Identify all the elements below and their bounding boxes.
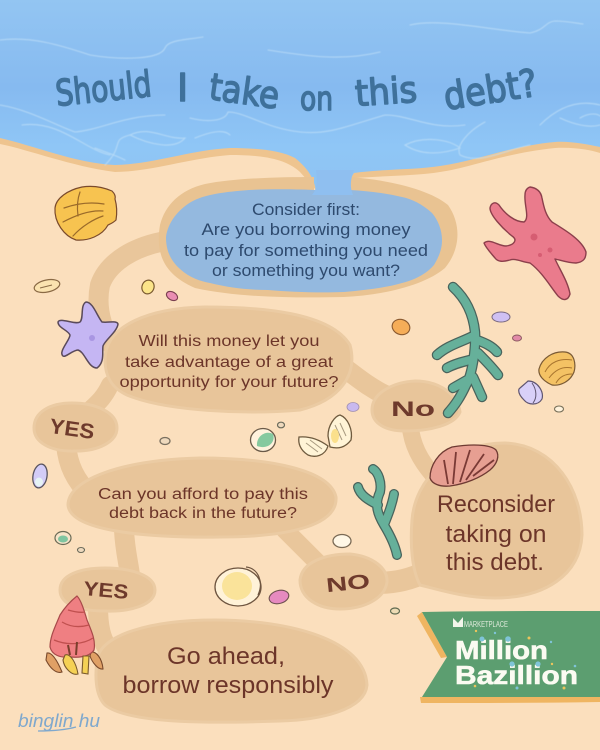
text: opportunity question: opportunity for your future? [120,374,339,391]
icon: white butterfly shell [299,415,351,456]
icon: pink pebble [165,290,179,302]
icon: green pebble [250,428,276,452]
text: opportunity question [120,333,339,391]
title: debt? [441,61,540,119]
icon: pink starfish [484,187,586,300]
text: consider first [184,201,428,280]
panel: no branch two [300,554,387,609]
icon: purple white shell [519,381,542,404]
text: go ahead [122,643,334,699]
pool sand rim [159,177,457,297]
title: I [177,66,188,110]
confetti dots [474,630,576,690]
icon: purple pebble [492,312,510,322]
text: afford question [98,486,308,522]
text: marketplace: MARKETPLACE [464,620,508,629]
text: go ahead: borrow responsibly [122,672,334,699]
water with channel [0,0,600,195]
text: consider first: or something you want? [212,262,400,280]
icon: striped yellow shell [539,352,575,385]
label: yes: YES [83,578,129,604]
icon: hermit crab [46,596,103,674]
icon: seaweed large [437,287,498,413]
signature: binglin hu [18,710,100,731]
label: yes: YES [48,415,96,444]
icon: lilac pebble [347,402,359,412]
icon: yellow scallop shell [55,186,117,240]
icon: yellow pebble [140,278,156,296]
icon: small shell left [33,277,61,295]
text: reconsider: this debt. [446,549,544,576]
panel: reconsider outcome [411,443,582,598]
text: afford question: debt back in the future? [109,505,297,522]
panel: go ahead outcome [96,620,367,722]
panel: yes branch two [60,568,155,611]
icon: pink pebble low [268,588,290,606]
icon: ring pebble right [554,406,564,412]
panel: afford question [68,458,336,537]
text: consider first: Consider first: [252,201,360,219]
text: consider first: Are you borrowing money [202,221,411,239]
icon: cream shell [215,567,261,606]
panel: no branch one [372,381,460,431]
shoreline sand band [0,100,600,190]
label: no: NO [325,571,371,597]
icon: green pebble left [55,532,71,544]
text: opportunity question: Will this money let you [138,333,320,350]
text: reconsider [437,491,555,576]
text: afford question: Can you afford to pay this [98,486,308,503]
icon: purple starfish [58,302,118,368]
icon: ring pebble left [160,438,170,444]
icon: ring pebble low [78,548,84,552]
icon: pink clam [430,445,498,486]
text: bazillion: Bazillion [455,660,578,690]
channel [312,170,354,195]
title: Should [54,64,153,115]
pool water [166,189,442,292]
title: take [207,65,282,118]
text: million: Million [455,635,548,665]
text: reconsider: taking on [446,521,546,548]
icon: small pink pebble [512,335,522,341]
sand path network [66,240,433,655]
text: go ahead: Go ahead, [167,643,285,670]
title: on [300,79,333,118]
panel: consider first pool [159,170,457,297]
icon: purple pebble left [31,463,49,489]
banner: million bazillion logo [417,611,600,703]
text: consider first: to pay for something you need [184,242,428,260]
panel: yes branch one [34,403,117,451]
title [54,61,540,119]
title: this [354,70,418,115]
icon: seaweed small [358,469,397,555]
icon: ring pebble small [278,422,284,428]
icon: marketplace mark [453,617,463,627]
icon: ring pebble bottom [390,608,400,614]
water foam lines [0,21,600,165]
panel: opportunity question [105,307,352,412]
icon: orange pebble [390,317,412,337]
icon: white pebble [333,534,351,548]
text: opportunity question: take advantage of a great [125,354,334,371]
text: reconsider: Reconsider [437,491,555,518]
label: no: No [391,398,435,421]
